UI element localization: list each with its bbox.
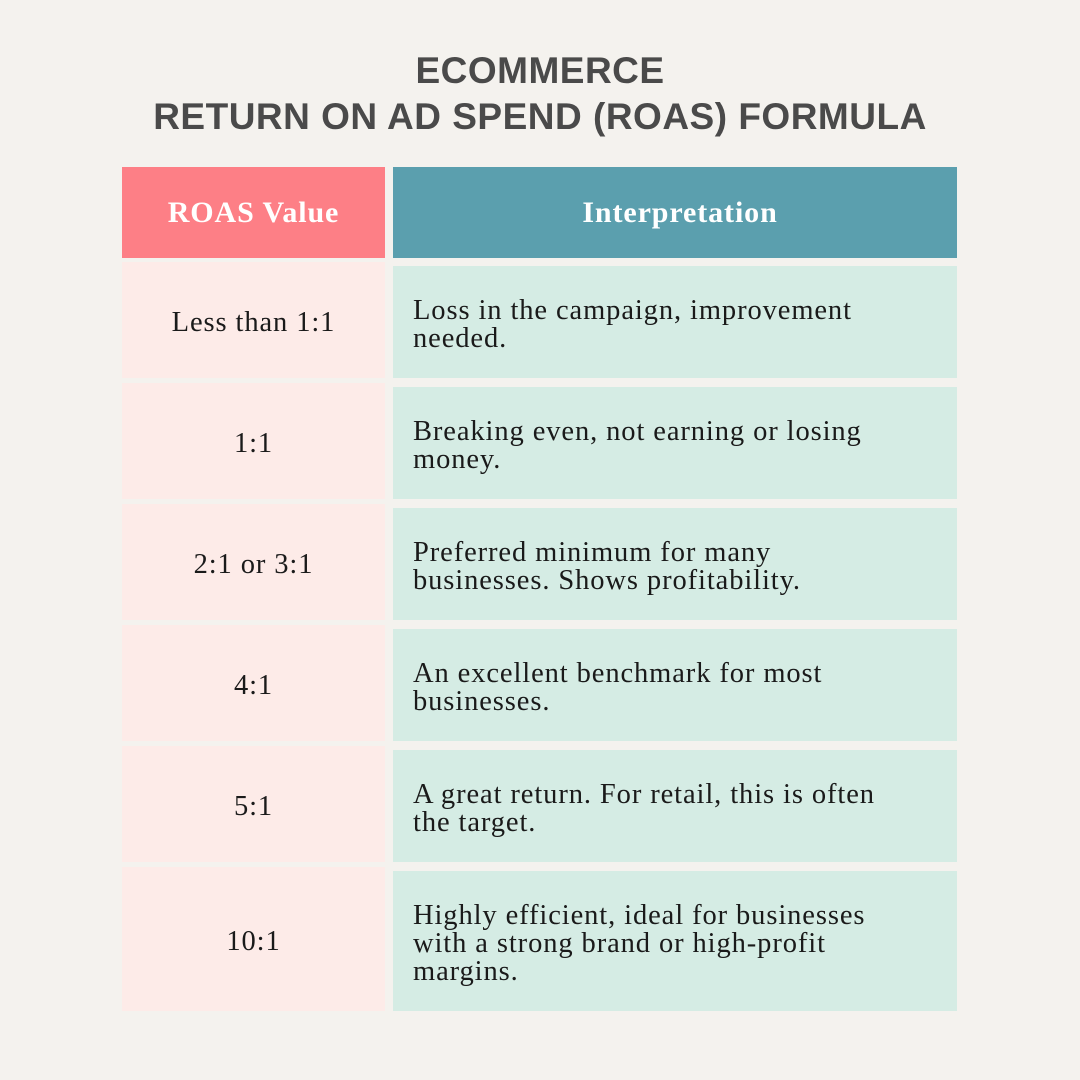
row 6 value [122,867,385,1011]
row 1 interpretation [393,266,957,378]
header: Interpretation: Interpretation [582,196,778,228]
row 3 interpretation: Preferred minimum for many [413,537,771,568]
row 5 value: 5:1 [234,791,273,822]
row 2 interpretation: money. [413,444,501,475]
row 1 value [122,262,385,378]
title: ECOMMERCE [415,50,665,91]
header: Interpretation [393,167,957,258]
row 2 value [122,383,385,499]
row 2 value: 1:1 [234,428,273,459]
title: RETURN ON AD SPEND (ROAS) FORMULA [153,96,927,137]
row 3 interpretation: businesses. Shows profitability. [413,565,801,596]
row 4 value: 4:1 [234,670,273,701]
header: ROAS Value [122,167,385,258]
row 3 value: 2:1 or 3:1 [194,549,313,580]
row 2 interpretation [393,387,957,499]
row 1 interpretation: needed. [413,323,507,354]
title [153,50,927,137]
row 5 interpretation: A great return. For retail, this is often [413,779,875,810]
row 4 value [122,625,385,741]
row 2 interpretation: Breaking even, not earning or losing [413,416,862,447]
row 6 interpretation: with a strong brand or high-profit [413,928,826,959]
row 3 value [122,504,385,620]
row 4 interpretation [393,629,957,741]
row 3 interpretation [393,508,957,620]
row 1 value: Less than 1:1 [172,307,335,338]
row 5 interpretation: the target. [413,807,536,838]
row 6 interpretation: Highly efficient, ideal for businesses [413,900,865,931]
row 1 interpretation: Loss in the campaign, improvement [413,295,852,326]
row 5 value [122,746,385,862]
row 4 interpretation: businesses. [413,686,550,717]
row 5 interpretation [393,750,957,862]
row 6 interpretation: margins. [413,956,519,987]
header: ROAS Value: ROAS Value [168,196,339,228]
row 6 interpretation [393,871,957,1011]
row 6 value: 10:1 [226,926,281,957]
row 4 interpretation: An excellent benchmark for most [413,658,822,689]
